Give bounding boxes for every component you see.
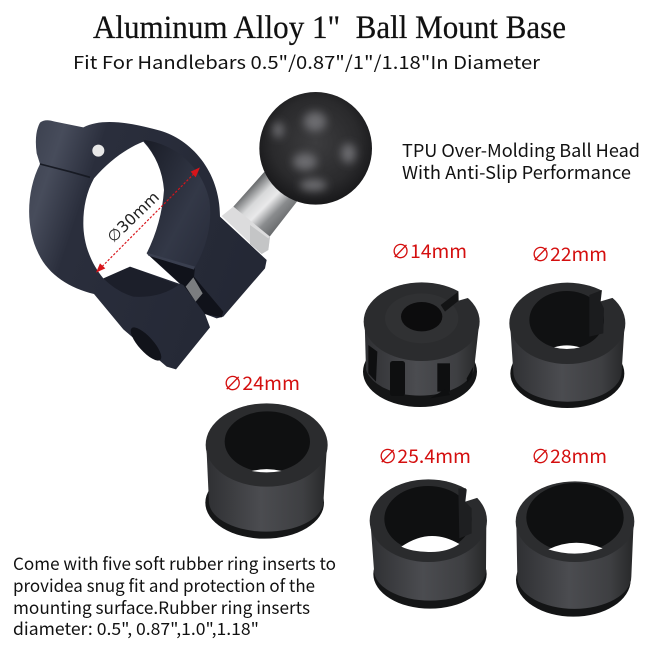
size label 22mm: ∅22mm [531,240,607,267]
description text: Come with five soft rubber ring inserts to [13,550,336,575]
TPU ball head note: TPU Over-Molding Ball Head [402,137,640,163]
rubber ball head [259,92,372,205]
title: Aluminum Alloy 1" Ball Mount Base [93,10,566,46]
hinge step [40,164,90,177]
clamp interior wall [143,140,210,267]
threaded stem [233,167,303,238]
size label 24mm: ∅24mm [223,369,300,396]
clamp screw [186,277,203,302]
diameter label: ∅30mm [104,188,163,246]
description text: diameter: 0.5", 0.87",1.0",1.18" [13,615,259,640]
hex nut [222,207,270,254]
insert 22mm [509,283,625,408]
size label 28mm: ∅28mm [531,442,607,469]
insert 14mm [363,282,480,407]
insert 28mm [516,481,634,617]
subtitle: Fit For Handlebars 0.5"/0.87"/1"/1.18"In Diameter [73,49,541,75]
TPU ball head note [402,137,640,185]
clamp opening [83,142,180,284]
clamp slot [147,253,223,317]
ball mount clamp product [29,92,372,369]
clamp body [29,120,267,369]
size label 14mm: ∅14mm [391,237,467,264]
TPU ball head note: With Anti-Slip Performance [402,159,631,185]
size label 25.4mm: ∅25.4mm [378,442,471,469]
description text: providea snug fit and protection of the [13,572,315,597]
hinge pin hole [92,145,104,157]
insert 25.4mm [370,479,487,609]
description text [13,550,336,640]
description text: mounting surface.Rubber ring inserts [13,594,310,619]
diameter arrow [96,167,200,273]
threaded base hole [126,323,166,365]
insert 24mm [205,403,328,539]
